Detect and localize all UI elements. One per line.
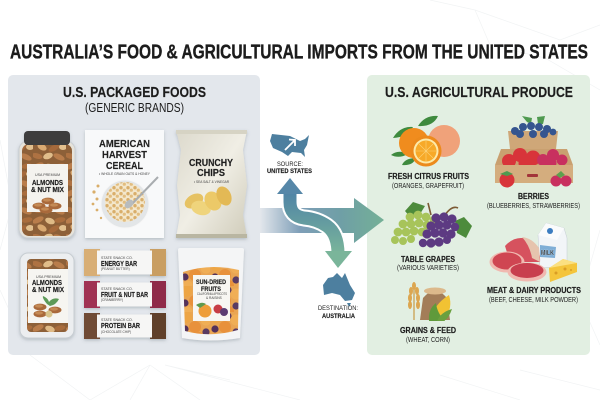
chips bag: CRUNCHY [189, 158, 233, 169]
icon: meat and dairy [490, 223, 577, 282]
icon: United States map [270, 134, 309, 157]
fruit and nut bar [84, 281, 166, 308]
label: table grapes: (VARIOUS VARIETIES) [397, 265, 459, 272]
panel: U.S. agricultural produce [367, 75, 590, 355]
cereal box: HARVEST [102, 150, 147, 161]
label: fresh citrus fruits: (ORANGES, GRAPEFRUIT) [392, 183, 464, 190]
tub: almonds and nut mix: ALMONDS [32, 278, 62, 287]
arrow: import flow to produce panel [260, 198, 384, 243]
jar: almonds and nut mix: & NUT MIX [31, 185, 64, 194]
energy bar: STATE SNACK CO. [101, 256, 133, 260]
energy bar [84, 249, 166, 276]
tub: almonds and nut mix [20, 253, 74, 338]
label: destination [318, 305, 358, 320]
label: berries: BERRIES [518, 192, 550, 201]
tub: almonds and nut mix: USA PREMIUM [36, 275, 61, 279]
panel heading: packaged foods [63, 84, 206, 115]
label: source [267, 161, 313, 175]
protein bar: PROTEIN BAR [101, 323, 140, 330]
label: source: UNITED STATES [267, 168, 313, 175]
pouch: sun-dried fruits: FRUITS [201, 286, 222, 293]
label: meat and dairy products: MEAT & DAIRY PRODUCTS [487, 286, 582, 295]
label: grains and feed: GRAINS & FEED [400, 326, 456, 335]
protein bar: (CHOCOLATE CHIP) [101, 330, 131, 334]
pouch: sun-dried fruits: SUN-DRIED [196, 279, 226, 286]
fruit and nut bar: FRUIT & NUT BAR [101, 292, 148, 299]
jar: almonds and nut mix [19, 131, 75, 238]
fruit and nut bar: (CRANBERRY) [101, 298, 123, 302]
pouch: sun-dried fruits [178, 248, 244, 340]
label: table grapes: TABLE GRAPES [401, 255, 456, 264]
icon: table grapes [391, 202, 472, 248]
pouch: sun-dried fruits: & RAISINS [206, 296, 222, 300]
panel: U.S. packaged foods [8, 75, 260, 355]
label: berries: (BLUEBERRIES, STRAWBERRIES) [487, 203, 580, 210]
tub: almonds and nut mix: & NUT MIX [32, 285, 64, 294]
label: destination: AUSTRALIA [322, 313, 355, 320]
cereal box: CEREAL [106, 161, 143, 172]
label: meat and dairy products [487, 286, 582, 304]
icon: meat and dairy: MILK [541, 250, 554, 257]
fruit and nut bar: STATE SNACK CO. [101, 287, 133, 291]
protein bar [84, 313, 166, 339]
label: table grapes [397, 255, 459, 272]
label: berries [487, 192, 580, 210]
panel heading: packaged foods: (GENERIC BRANDS) [85, 100, 184, 115]
label: grains and feed [400, 326, 456, 344]
chips bag: CHIPS [197, 168, 225, 179]
label: meat and dairy products: (BEEF, CHEESE, MILK POWDER) [489, 297, 578, 304]
label: fresh citrus fruits: FRESH CITRUS FRUITS [388, 172, 470, 181]
cereal box: AMERICAN [99, 139, 150, 150]
cereal box [85, 130, 164, 238]
arrow: source to destination curve [277, 178, 352, 268]
icon: berries [495, 116, 573, 188]
energy bar: ENERGY BAR [101, 261, 137, 268]
cereal box: • WHOLE GRAIN OATS & HONEY [99, 172, 151, 176]
label: fresh citrus fruits [388, 172, 470, 190]
jar: almonds and nut mix: USA PREMIUM [35, 173, 60, 177]
label: grains and feed: (WHEAT, CORN) [406, 337, 450, 344]
energy bar: (PEANUT BUTTER) [101, 267, 130, 271]
protein bar: STATE SNACK CO. [101, 318, 133, 322]
label: destination: DESTINATION: [318, 305, 358, 312]
icon: grains and feed [408, 282, 452, 321]
jar: almonds and nut mix: ALMONDS [32, 178, 63, 187]
pouch: sun-dried fruits: CALIFORNIA APRICOTS [197, 292, 227, 296]
icon: Australia map [323, 273, 355, 307]
chips bag [176, 130, 247, 238]
icon: citrus fruits [391, 116, 460, 166]
label: source: SOURCE: [277, 161, 303, 168]
chips bag: • SEA SALT & VINEGAR [194, 180, 230, 184]
panel heading: packaged foods: U.S. PACKAGED FOODS [63, 84, 206, 101]
